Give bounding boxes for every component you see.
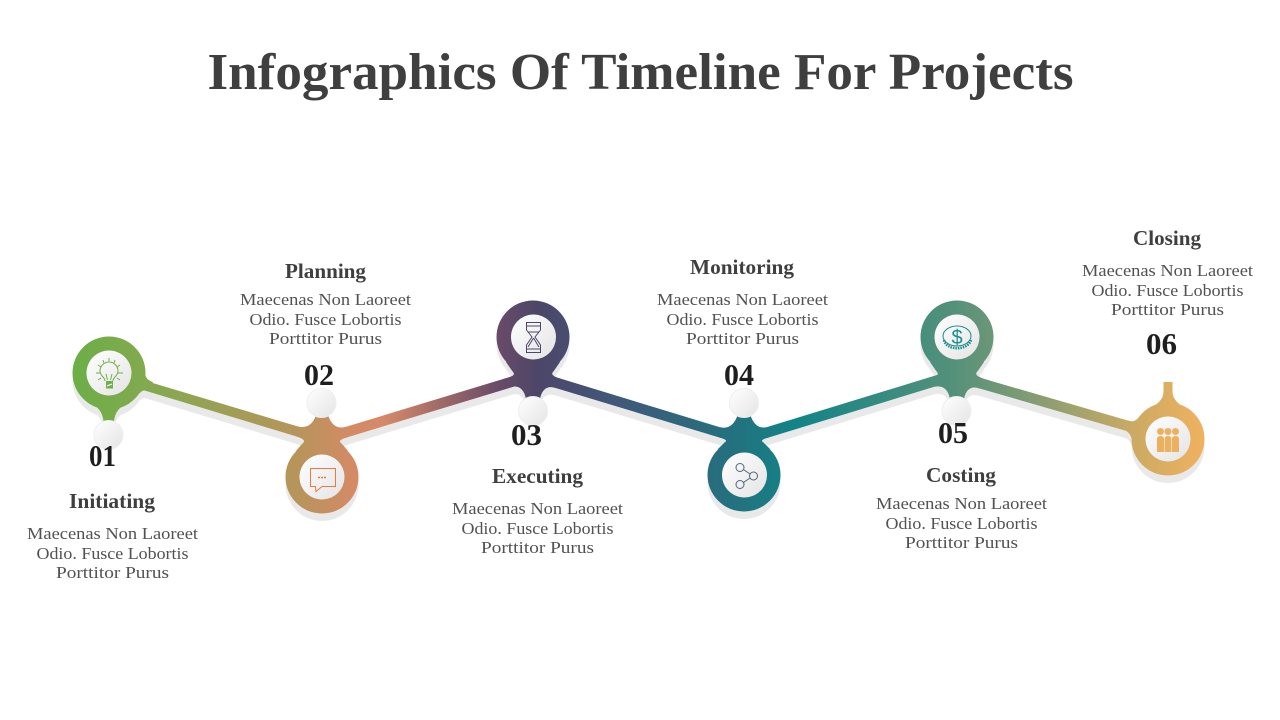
step 2: planning: [240, 259, 411, 500]
description 5: Maecenas Non Laoreet: [876, 494, 1047, 513]
connector ball 2: [307, 388, 336, 418]
heading: planning: Planning: [285, 259, 366, 283]
description 6: Maecenas Non Laoreet: [1082, 261, 1253, 280]
connector ball 5: [942, 396, 971, 426]
icon: hourglass: [511, 314, 556, 360]
step 3: executing: [452, 314, 623, 557]
step 1: initiating: [27, 350, 198, 582]
icon: speech bubble: [300, 454, 344, 500]
heading: costing: Costing: [926, 463, 996, 487]
connector ball 3: [518, 396, 548, 426]
timeline ribbon: [72, 300, 1204, 514]
description 1: Odio. Fusce Lobortis: [36, 544, 188, 563]
heading: closing: Closing: [1133, 226, 1202, 250]
description 3: [452, 499, 623, 557]
description 4: Porttitor Purus: [686, 329, 799, 348]
description 4: Maecenas Non Laoreet: [657, 290, 828, 309]
description 6: Porttitor Purus: [1111, 300, 1224, 319]
description 3: Odio. Fusce Lobortis: [462, 519, 614, 538]
number 06: 06: [1146, 326, 1177, 361]
description 6: Odio. Fusce Lobortis: [1092, 281, 1244, 300]
description 4: Odio. Fusce Lobortis: [666, 310, 818, 329]
description 5: [876, 494, 1047, 552]
icon: people: [1146, 416, 1190, 462]
description 5: Porttitor Purus: [905, 533, 1018, 552]
number 02: 02: [304, 357, 334, 392]
icon: dollar coin: [934, 314, 980, 360]
description 1: Porttitor Purus: [56, 563, 169, 582]
step 4: monitoring: [657, 255, 828, 498]
step 6: closing: [1082, 226, 1253, 462]
timeline ribbon shadow: [72, 308, 1204, 521]
description 5: Odio. Fusce Lobortis: [886, 514, 1038, 533]
number 03: 03: [511, 417, 542, 452]
description 3: Porttitor Purus: [481, 538, 594, 557]
heading: monitoring: Monitoring: [690, 255, 794, 279]
description 6: [1082, 261, 1253, 319]
description 2: Maecenas Non Laoreet: [240, 290, 411, 309]
heading: initiating: Initiating: [69, 489, 156, 513]
description 2: [240, 290, 411, 348]
icon: dollar coin: $: [951, 327, 963, 349]
icon: share nodes: [722, 452, 767, 498]
description 1: Maecenas Non Laoreet: [27, 524, 198, 543]
heading: executing: Executing: [492, 464, 583, 488]
icon: light bulb: [86, 350, 132, 396]
number 01: 01: [89, 438, 116, 473]
title: Infographics Of Timeline For Projects: [208, 44, 1074, 101]
description 3: Maecenas Non Laoreet: [452, 499, 623, 518]
number 05: 05: [938, 415, 968, 450]
connector ball 1: [94, 420, 123, 450]
number 04: 04: [724, 357, 754, 392]
connector ball 4: [730, 388, 758, 418]
description 2: Porttitor Purus: [269, 329, 382, 348]
description 2: Odio. Fusce Lobortis: [250, 310, 402, 329]
step 5: costing: [876, 314, 1047, 552]
description 1: [27, 524, 198, 582]
description 4: [657, 290, 828, 348]
